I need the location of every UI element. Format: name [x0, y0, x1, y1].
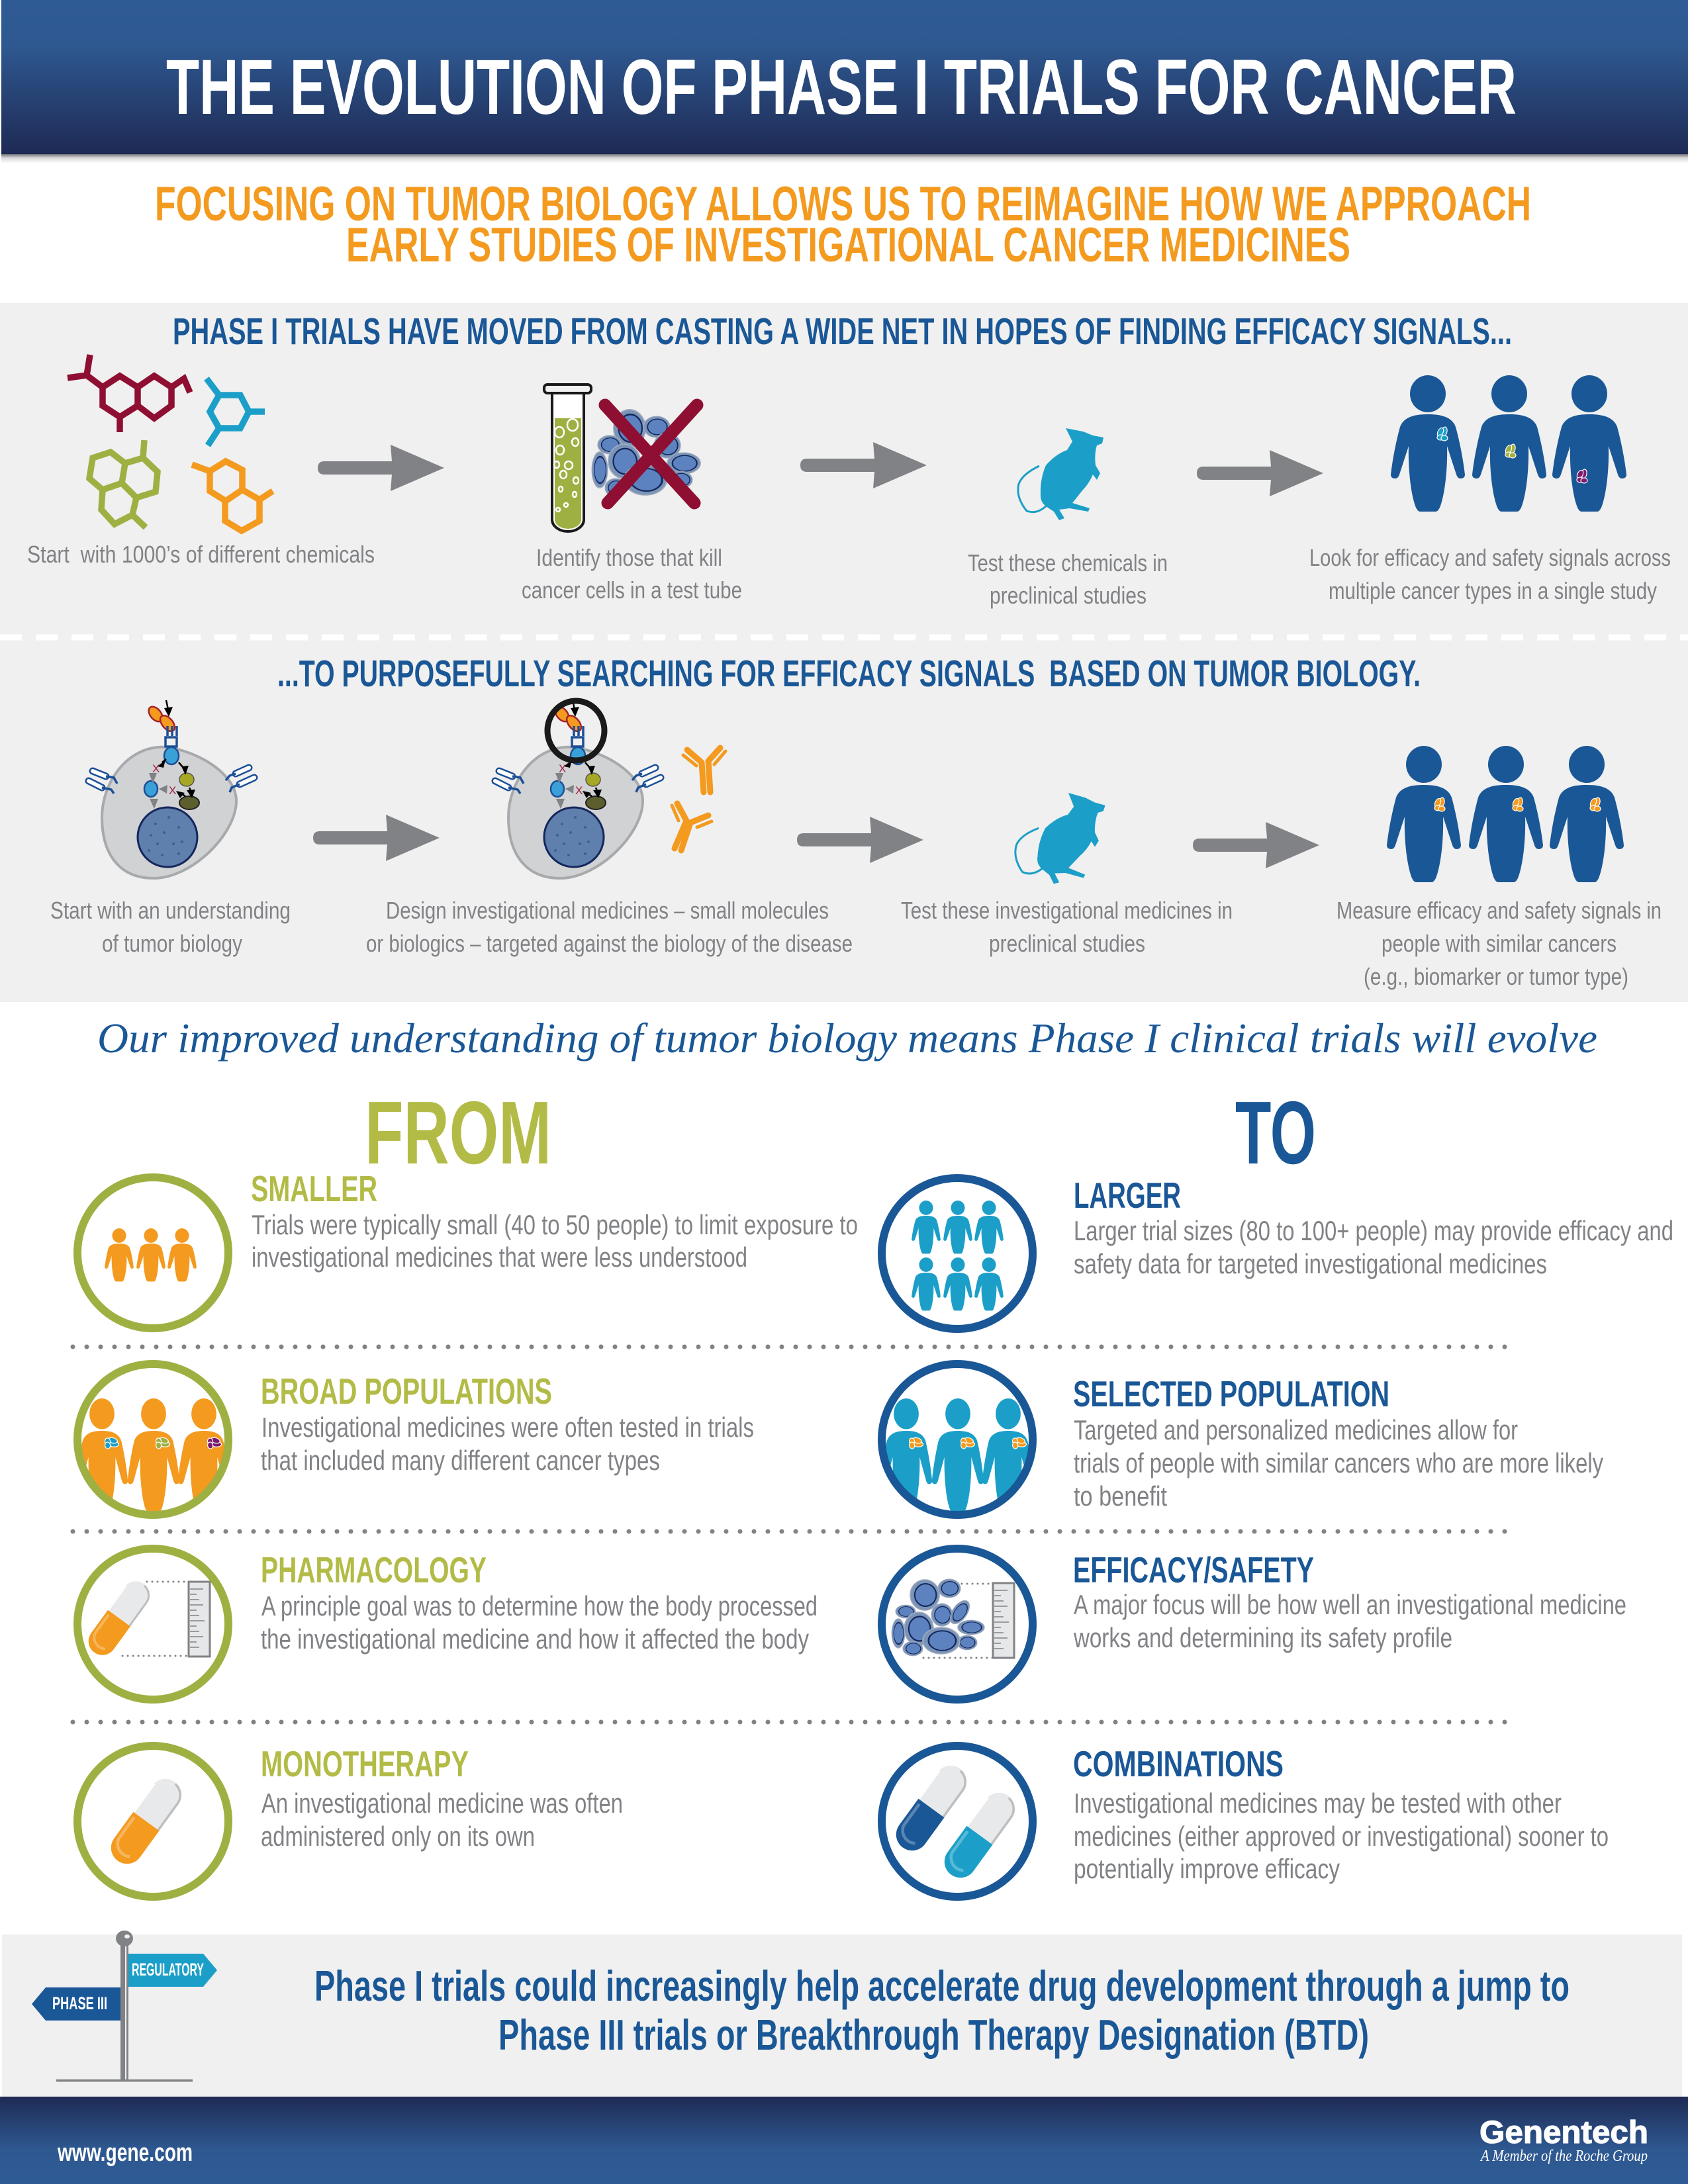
tagline: Our improved understanding of tumor biology means Phase I clinical trials will evolve — [97, 1015, 1597, 1062]
text: efficacy/safety: works and determining its safety profile — [1073, 1622, 1452, 1653]
icon: people with multiple cancer types — [1391, 375, 1626, 512]
website: www.gene.com — [57, 2139, 193, 2167]
icon: selected population — [880, 1364, 1034, 1515]
icon: small trial — [77, 1177, 228, 1328]
icon: signpost: REGULATORY — [132, 1960, 204, 1979]
icon: tumor cells and ruler — [882, 1549, 1033, 1700]
heading: smaller: SMALLER — [251, 1168, 377, 1209]
caption: multiple cancer types — [1309, 544, 1671, 604]
text: pharmacology: A principle goal was to determine how the body processed — [261, 1590, 818, 1621]
text: selected population: to benefit — [1074, 1480, 1167, 1512]
text: combinations: Investigational medicines may be tested with other — [1074, 1788, 1562, 1819]
text: monotherapy — [261, 1788, 623, 1852]
caption: test tube: Identify those that kill — [536, 544, 722, 571]
text: monotherapy: administered only on its own — [261, 1821, 535, 1852]
caption: similar cancers: (e.g., biomarker or tumor type) — [1364, 963, 1628, 990]
icon: antibodies — [672, 748, 726, 850]
caption: preclinical medicines: preclinical studies — [989, 930, 1145, 957]
caption: preclinical medicines — [901, 897, 1233, 957]
icon: mouse targeted — [1013, 789, 1106, 887]
icon: single capsule — [77, 1746, 228, 1897]
text: combinations — [1074, 1788, 1609, 1884]
arrow 1 — [318, 445, 444, 491]
heading: TO: TO — [1235, 1083, 1316, 1183]
icon: targeted cell with ring — [495, 700, 661, 878]
logo: Genentech — [1479, 2115, 1648, 2165]
caption: similar cancers: people with similar cancers — [1382, 930, 1617, 957]
row: combinations — [882, 1743, 1609, 1897]
caption: preclinical chemicals — [968, 549, 1168, 609]
icon: capsule and ruler — [77, 1549, 228, 1700]
row: smaller — [77, 1168, 858, 1328]
dotted dividers — [73, 1347, 1511, 1722]
icon: mouse — [1018, 428, 1103, 520]
footer — [0, 2097, 1688, 2184]
text: broad populations: that included many different cancer types — [261, 1445, 660, 1476]
caption: test tube: cancer cells in a test tube — [522, 576, 742, 604]
text: selected population: Targeted and personalized medicines allow for — [1074, 1414, 1518, 1445]
heading: efficacy/safety: EFFICACY/SAFETY — [1073, 1549, 1314, 1590]
text: pharmacology: the investigational medicine and how it affected the body — [261, 1623, 809, 1655]
icon: signpost — [32, 1931, 217, 2082]
heading: larger: LARGER — [1074, 1175, 1181, 1216]
panel: conclusion — [2, 1931, 1682, 2097]
arrow 6 — [1193, 822, 1319, 868]
row: broad populations — [76, 1364, 754, 1515]
text: larger: safety data for targeted investigational medicines — [1074, 1248, 1547, 1279]
caption: similar cancers — [1336, 897, 1662, 990]
row: pharmacology — [77, 1549, 818, 1700]
heading: pharmacology: PHARMACOLOGY — [261, 1549, 487, 1590]
caption: tumor biology: Start with an understanding — [50, 897, 291, 924]
text: smaller: Trials were typically small (40 to 50 people) to limit exposure to — [252, 1209, 858, 1240]
icon: people with similar cancers — [1387, 746, 1624, 882]
heading: FROM: FROM — [365, 1083, 551, 1183]
arrow 3 — [1197, 450, 1323, 496]
icon: broad population — [76, 1364, 230, 1515]
caption: tumor biology: of tumor biology — [102, 930, 242, 957]
conclusion text — [314, 1962, 1570, 2059]
caption: preclinical chemicals: Test these chemicals in — [968, 549, 1168, 576]
caption: chemicals: Start with 1000’s of different chemicals — [27, 541, 375, 568]
text: smaller — [252, 1209, 858, 1273]
logo: Genentech: Genentech — [1479, 2115, 1648, 2150]
caption: design medicines — [366, 897, 853, 957]
arrow 4 — [313, 815, 440, 861]
arrow 2 — [800, 442, 927, 488]
text: monotherapy: An investigational medicine was often — [261, 1788, 623, 1819]
arrow 5 — [797, 817, 923, 863]
caption: preclinical chemicals: preclinical studies — [990, 582, 1147, 609]
icon: two capsules — [882, 1746, 1033, 1897]
conclusion text: Phase III trials or Breakthrough Therapy Designation (BTD) — [498, 2011, 1369, 2059]
caption: preclinical medicines: Test these investigational medicines in — [901, 897, 1233, 924]
logo: Genentech: A Member of the Roche Group — [1479, 2148, 1648, 2165]
row: larger — [882, 1175, 1673, 1329]
text: selected population — [1074, 1414, 1603, 1512]
heading: monotherapy: MONOTHERAPY — [261, 1743, 469, 1784]
text: broad populations — [261, 1412, 754, 1476]
icon: chemical molecules — [68, 355, 273, 531]
row: monotherapy — [77, 1743, 623, 1897]
header banner — [1, 0, 1688, 163]
text: broad populations: Investigational medicines were often tested in trials — [261, 1412, 754, 1443]
heading: combinations: COMBINATIONS — [1073, 1743, 1284, 1784]
text: pharmacology — [261, 1590, 818, 1655]
text: efficacy/safety — [1073, 1589, 1626, 1653]
heading: selected population: SELECTED POPULATION — [1073, 1373, 1389, 1414]
icon: signpost: PHASE III — [52, 1993, 107, 2013]
caption: design medicines: or biologics – targeted against the biology of the disease — [366, 930, 853, 957]
row: selected population — [880, 1364, 1603, 1515]
caption: design medicines: Design investigational medicines – small molecules — [386, 897, 829, 924]
heading: broad populations: BROAD POPULATIONS — [261, 1371, 552, 1412]
panel: from casting a wide net to purposeful searching — [0, 303, 1688, 1002]
caption: test tube — [522, 544, 742, 604]
text: combinations: potentially improve efficacy — [1074, 1853, 1340, 1884]
icon: test tube — [544, 385, 591, 531]
row: efficacy/safety — [882, 1549, 1626, 1700]
text: smaller: investigational medicines that were less understood — [252, 1242, 747, 1273]
icon: tumor cell signaling — [89, 700, 254, 878]
caption: tumor biology — [50, 897, 291, 957]
icon: larger trial — [882, 1178, 1033, 1329]
text: larger — [1074, 1215, 1673, 1279]
subtitle — [155, 177, 1531, 272]
icon: crossed-out cancer cells — [592, 405, 700, 503]
